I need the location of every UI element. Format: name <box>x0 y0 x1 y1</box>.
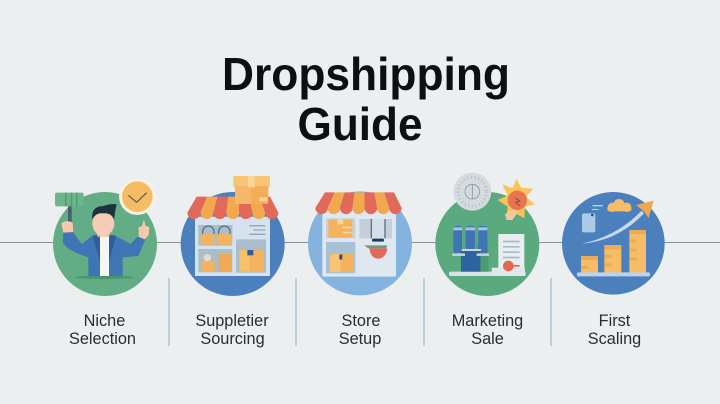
label: Niche Selection <box>69 312 136 348</box>
label: Marketing Sale <box>452 312 523 348</box>
label: Suppletier Sourcing <box>195 312 269 348</box>
label: Niche Selection: Niche <box>84 312 125 330</box>
icon: marketing sale with dial, idea bulb and document <box>435 173 539 296</box>
icon: store setup shop <box>308 191 412 295</box>
title <box>222 48 510 150</box>
label: Marketing Sale: Marketing <box>452 312 523 330</box>
icon: supplier sourcing shop with boxes <box>181 176 285 296</box>
divider lines <box>169 278 551 346</box>
label: Suppletier Sourcing: Suppletier <box>195 312 269 330</box>
title: Dropshipping <box>222 48 510 100</box>
title: Guide <box>298 98 422 150</box>
label: Store Setup: Store <box>342 312 380 330</box>
label: Suppletier Sourcing: Sourcing <box>200 330 265 348</box>
icon: niche selection person with hammer and check badge <box>53 178 157 296</box>
label: First Scaling: Scaling <box>588 330 641 348</box>
label: Niche Selection: Selection <box>69 330 136 348</box>
label: Store Setup: Setup <box>339 330 381 348</box>
label: First Scaling: First <box>599 312 631 330</box>
icon: first scaling bar chart with arrow <box>562 192 665 295</box>
label: Store Setup <box>339 312 381 348</box>
label: Marketing Sale: Sale <box>471 330 504 348</box>
label: First Scaling <box>588 312 641 348</box>
